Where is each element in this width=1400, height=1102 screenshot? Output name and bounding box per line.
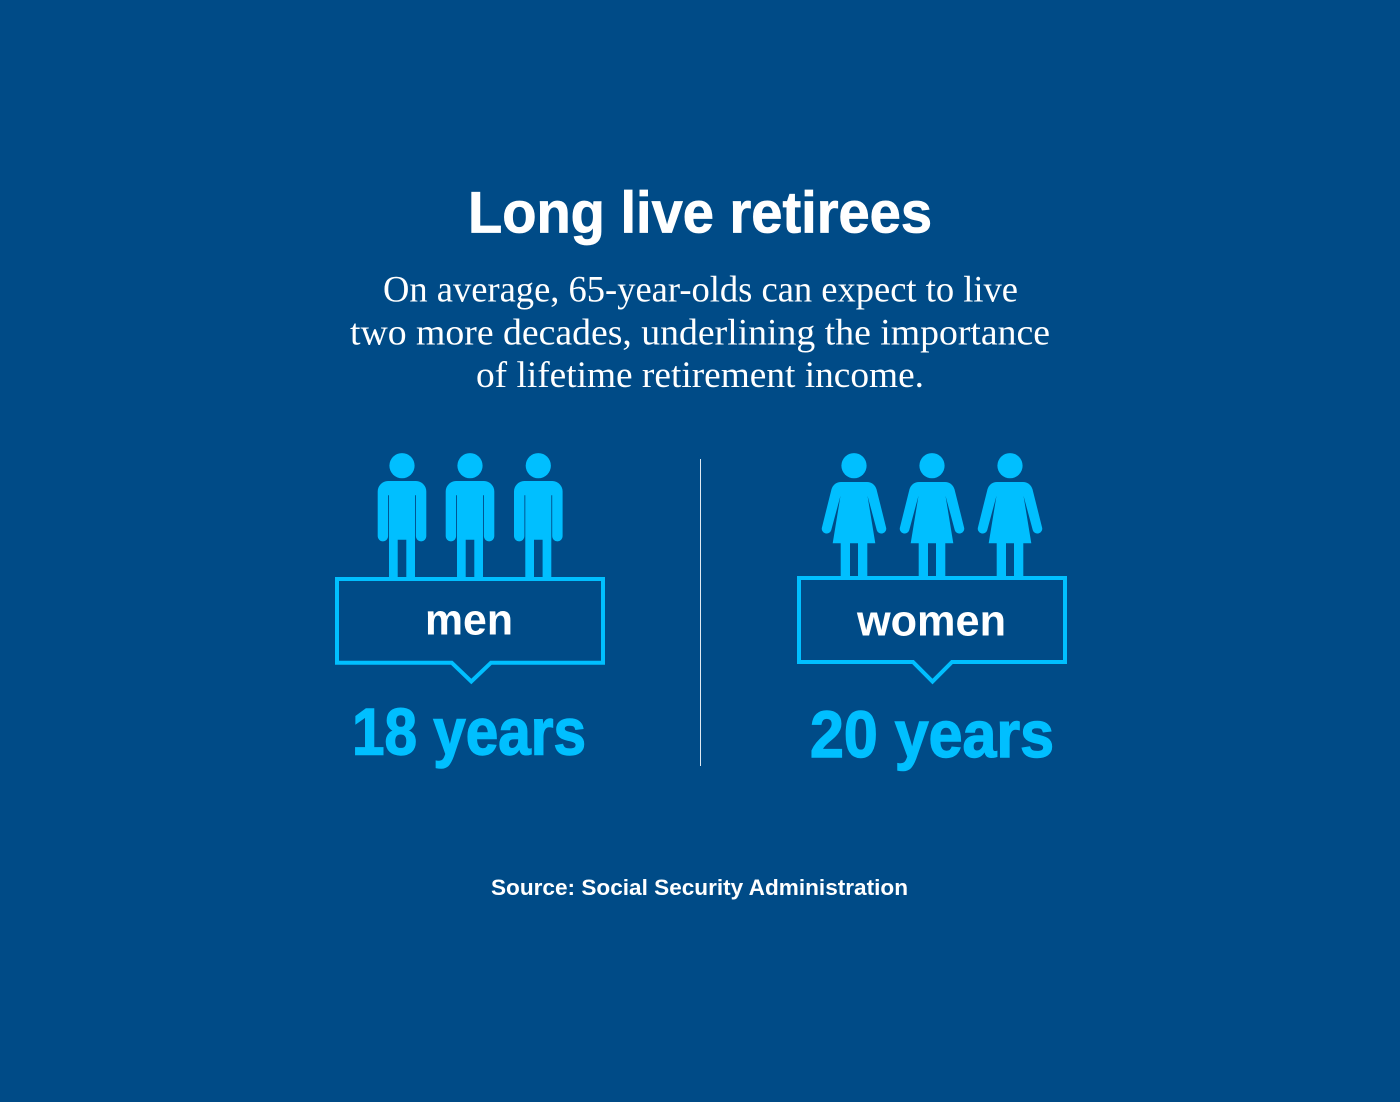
subtitle text block	[350, 269, 1050, 395]
value: 20 years: 20 years	[810, 697, 1054, 771]
subtitle text block: of lifetime retirement income.	[476, 354, 924, 395]
callout box: women	[799, 578, 1065, 682]
divider	[700, 459, 701, 766]
icons: three women	[822, 453, 1042, 577]
title: Long live retirees	[468, 180, 932, 246]
source note: Source: Social Security Administration	[491, 875, 908, 900]
value: 18 years: 18 years	[352, 694, 586, 768]
icons: three men	[378, 453, 563, 578]
label: women: women	[856, 596, 1006, 646]
label: men: men	[425, 596, 513, 644]
subtitle text block: two more decades, underlining the importance	[350, 311, 1050, 352]
callout box: men	[337, 579, 603, 682]
subtitle text block: On average, 65-year-olds can expect to live	[383, 269, 1018, 310]
